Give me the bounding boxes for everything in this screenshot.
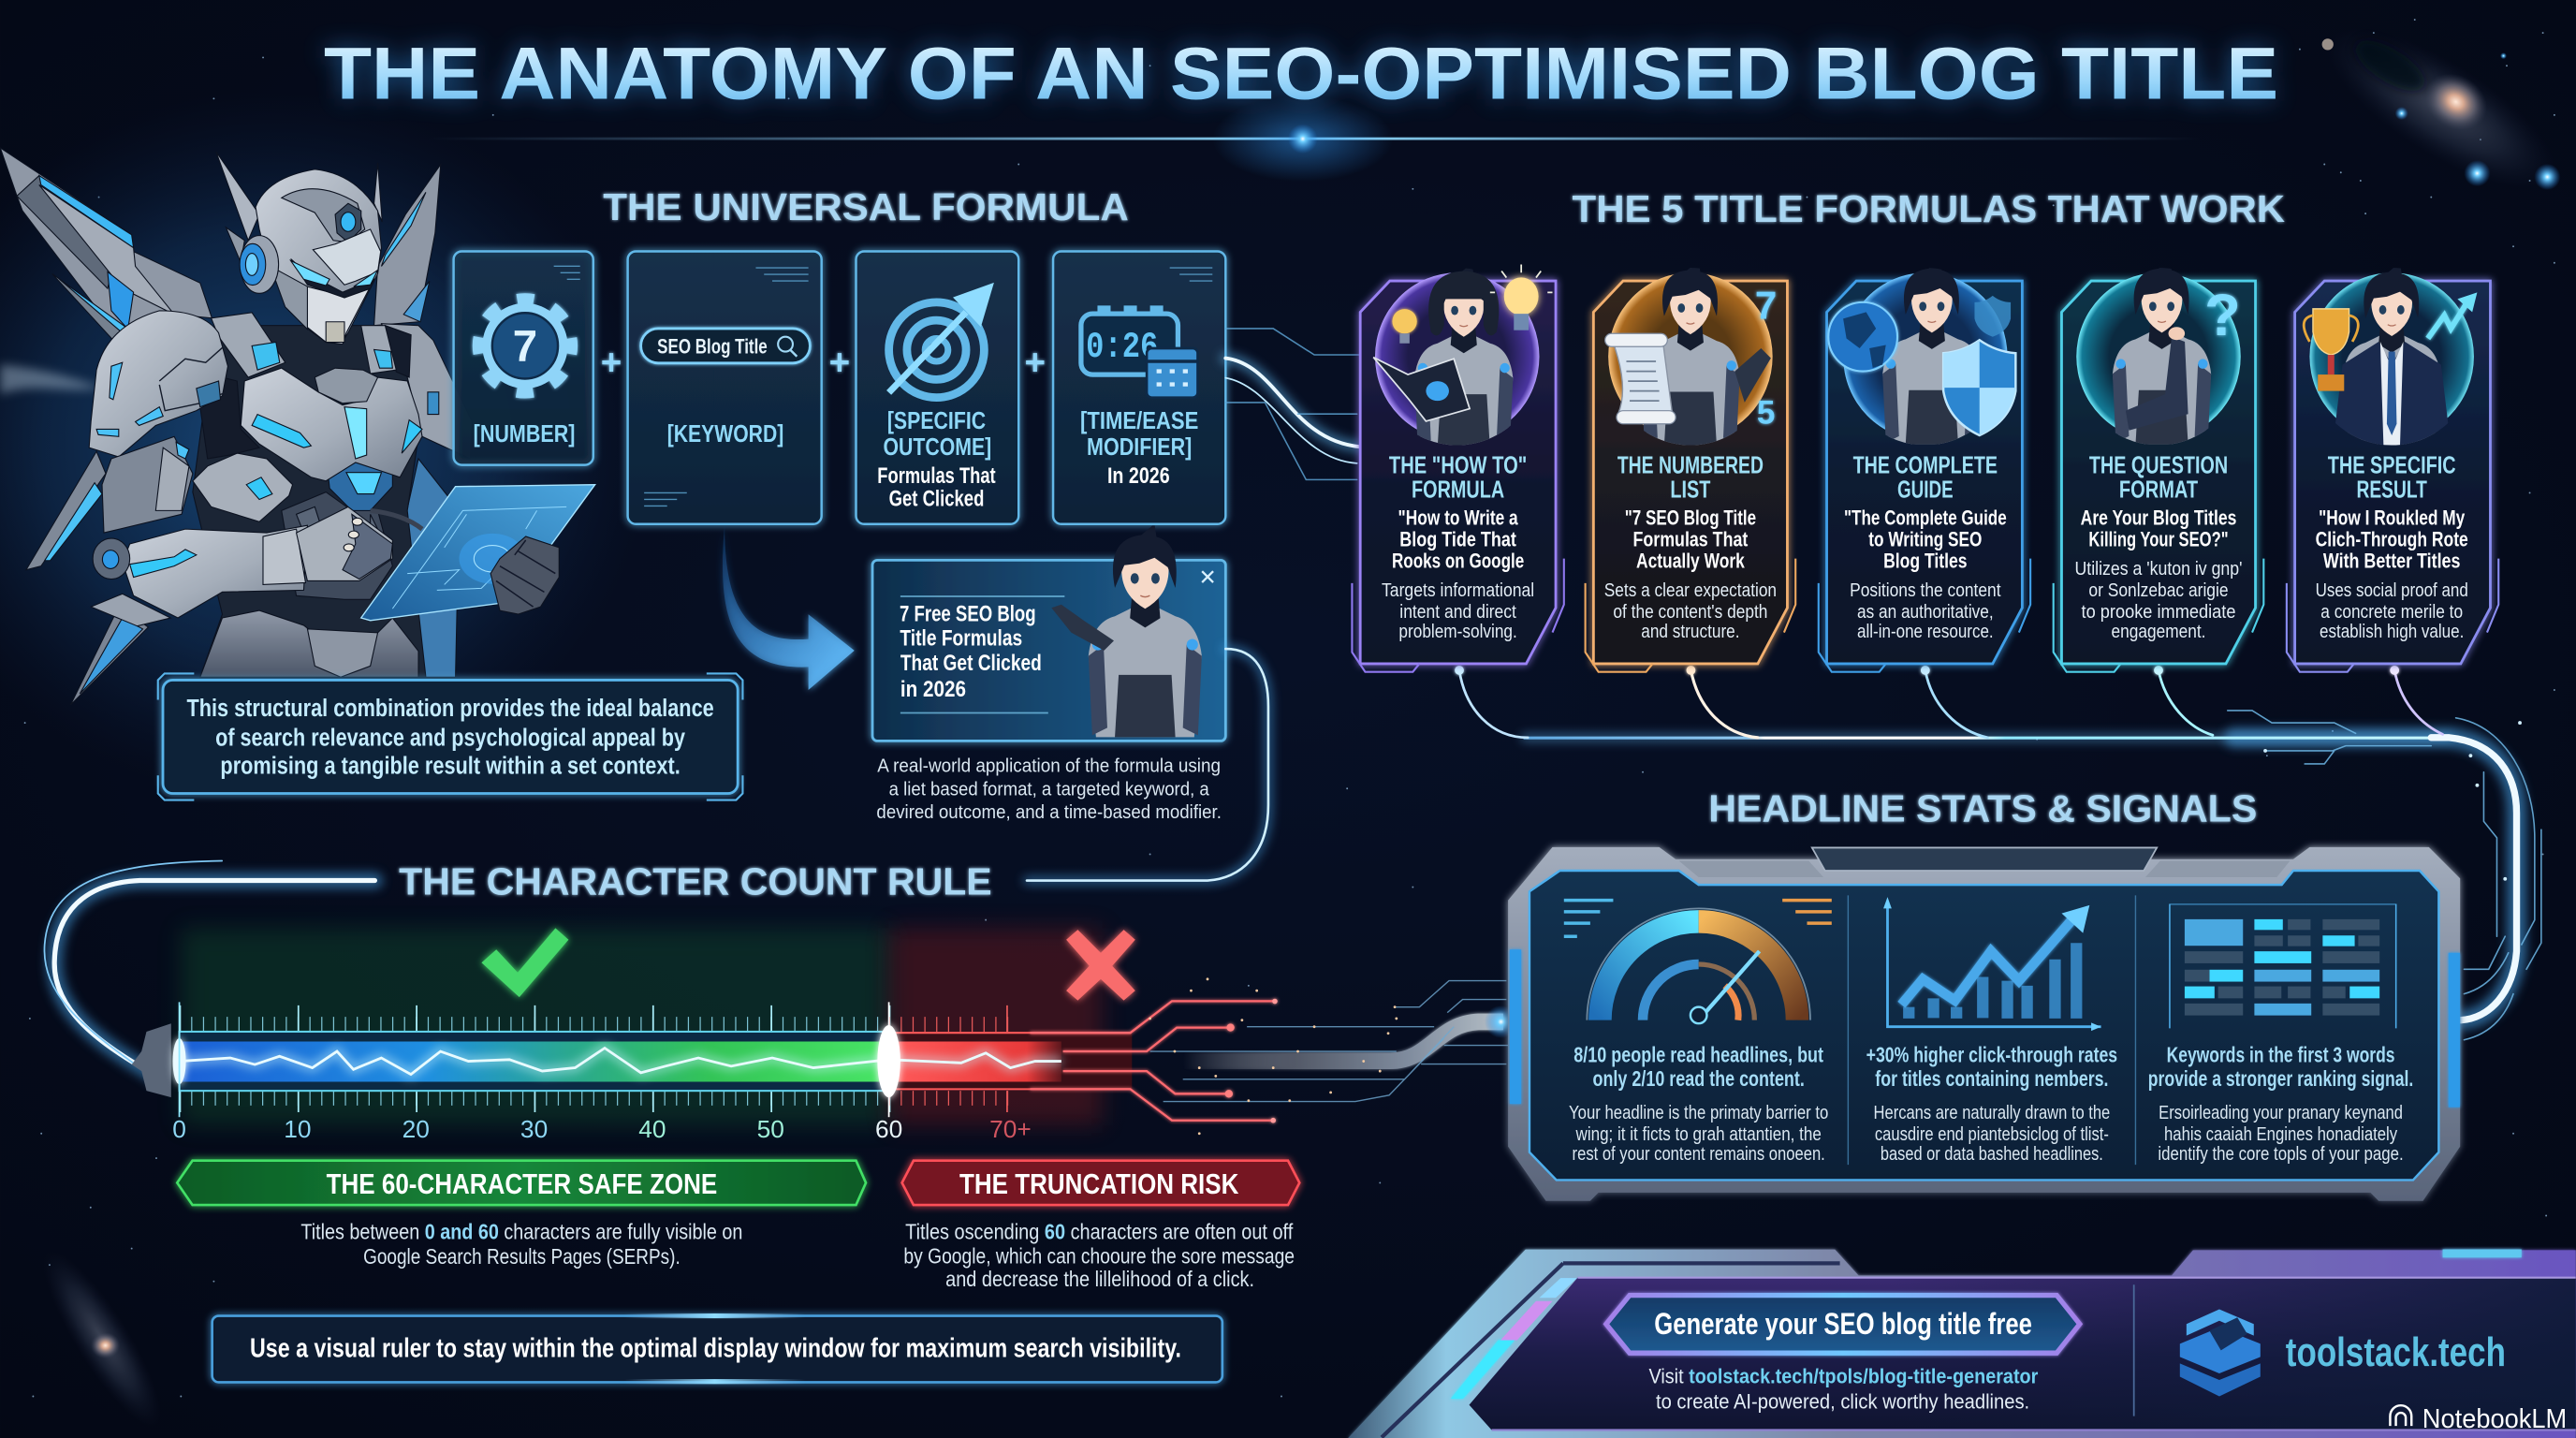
card: the how to formula (1352, 263, 1564, 672)
stat text: keywords (2148, 1042, 2413, 1165)
card: the question format: to prooke immediate (2082, 602, 2235, 623)
panel body (1470, 1278, 2576, 1430)
card: the complete guide: to Writing SEO (1868, 527, 1982, 550)
banner: truncation risk (902, 1161, 1299, 1205)
formula card: keyword: [KEYWORD] (667, 421, 783, 448)
card: the how to formula: Rooks on Google (1392, 549, 1524, 572)
icon: clock and calendar: 0:26 (1086, 327, 1158, 368)
connector: ruler left loop (44, 860, 374, 1076)
card: the question format: or Sonlzebac arigie (2088, 580, 2229, 601)
formula card: specific outcome: OUTCOME] (883, 434, 991, 461)
formula card: time/ease modifier: MODIFIER] (1087, 434, 1192, 461)
formula card: time/ease modifier (1053, 251, 1225, 524)
truncation circuit lines (1031, 999, 1278, 1123)
icon: gear with 7: 7 (513, 322, 537, 372)
notebooklm watermark: NotebookLM (2422, 1404, 2567, 1434)
cta text: to create AI-powered, click worthy headlines. (1656, 1390, 2029, 1414)
panel frame (1508, 847, 2460, 1201)
ruler numbers: 70+ (989, 1115, 1032, 1143)
text: truncation description (903, 1220, 1295, 1291)
card: the numbered list: Actually Work (1636, 549, 1745, 572)
robot mascot (0, 91, 649, 797)
stat text: keywords: Ersoirleading your pranary keynand (2159, 1103, 2403, 1123)
ruler end cap (132, 1023, 171, 1097)
galaxy: top right (2305, 0, 2576, 217)
formula card: time/ease modifier: [TIME/EASE (1080, 408, 1198, 434)
card: the specific result: Clich-Through Rote (2316, 527, 2468, 550)
card: the how to formula: "How to Write a (1398, 506, 1518, 530)
plus sign: + (601, 343, 622, 383)
card: the numbered list: 7 (1755, 283, 1777, 327)
stat text: headlines: wing; it it ficts to grah attantien, the (1575, 1124, 1822, 1145)
stat text: click-through: +30% higher click-through rates (1866, 1042, 2117, 1066)
text: safe zone description (300, 1220, 742, 1269)
stat text: click-through: causdire end piantebsiclog of tlist- (1875, 1124, 2109, 1145)
formula card: specific outcome: [SPECIFIC (887, 408, 986, 434)
ruler numbers: 30 (520, 1115, 548, 1143)
keyword grid (2170, 904, 2396, 1028)
ruler numbers (172, 1115, 1032, 1143)
example title card: That Get Clicked (900, 652, 1042, 676)
icon: growth arrow (2428, 292, 2477, 338)
title divider (428, 96, 2202, 182)
card: the numbered list: Sets a clear expectation (1604, 580, 1777, 601)
cta text: Visit toolstack.tech/tpols/blog-title-generator (1649, 1364, 2039, 1387)
heading: the universal formula: THE UNIVERSAL FORMULA (603, 185, 1129, 228)
card: the complete guide: Positions the content (1850, 580, 2001, 601)
search bar: SEO Blog Title (657, 334, 768, 358)
ruler numbers: 0 (172, 1115, 186, 1143)
stat text: click-through: Hercans are naturally drawn to the (1874, 1103, 2110, 1123)
main title: THE ANATOMY OF AN SEO-OPTIMISED BLOG TITLE (324, 32, 2278, 114)
main title: THE ANATOMY OF AN SEO-OPTIMISED BLOG TITLE (324, 32, 2278, 114)
card: the specific result: THE SPECIFIC (2328, 452, 2456, 478)
stat text: click-through (1866, 1042, 2117, 1165)
callout: structural combination: of search relevance and psychological appeal by (215, 724, 685, 752)
heading: the 5 title formulas: THE 5 TITLE FORMULAS THAT WORK (1573, 187, 2285, 230)
text: truncation description: and decrease the lillelihood of a click. (945, 1267, 1254, 1291)
formula card: keyword (628, 251, 822, 524)
callout: structural combination (158, 673, 742, 800)
card: the question format: FORMAT (2119, 477, 2198, 504)
ruler numbers: 10 (284, 1115, 312, 1143)
card: the specific result: a concrete merile to (2320, 602, 2463, 623)
panel frame (1348, 1250, 2576, 1438)
icon: bulbs (1392, 265, 1553, 344)
banner: safe zone (177, 1161, 866, 1205)
zone glow backgrounds (181, 928, 1103, 1125)
search bar (641, 329, 810, 363)
formula card: specific outcome: Get Clicked (889, 487, 984, 511)
connector: formula cards to title formulas (1225, 329, 1360, 479)
portrait: complete guide (1843, 258, 2008, 445)
card: the numbered list: "7 SEO Blog Title (1625, 506, 1756, 530)
stat text: keywords: identify the core topls of your page. (2158, 1144, 2404, 1165)
galaxy: bottom left (26, 1239, 179, 1438)
example title card: Title Formulas (900, 627, 1022, 652)
icon: cross mark (1066, 930, 1135, 1001)
card: the question format: THE QUESTION (2089, 452, 2228, 478)
ruler numbers: 20 (402, 1115, 430, 1143)
card: the specific result (2287, 262, 2498, 672)
card: the complete guide: "The Complete Guide (1844, 506, 2007, 530)
arrow: formula to example (723, 526, 855, 690)
example title card: in 2026 (900, 678, 966, 702)
card: the how to formula: Targets informational (1382, 580, 1534, 601)
card: the how to formula: THE "HOW TO" (1389, 452, 1527, 478)
portrait: specific result (2309, 262, 2474, 448)
cta button (1606, 1296, 2080, 1353)
connector: example card to character rule (1027, 649, 1268, 881)
example caption: a liet based format, a targeted keyword, a (889, 779, 1209, 800)
stat text: headlines: rest of your content remains onoeen. (1573, 1144, 1825, 1165)
stat text: keywords: Keywords in the first 3 words (2167, 1042, 2395, 1066)
callout: structural combination: promising a tangible result within a set context. (220, 751, 681, 779)
card: the question format: engagement. (2112, 622, 2205, 642)
character ruler (132, 1002, 1132, 1117)
card: the question format: Utilizes a 'kuton iv gnp' (2075, 559, 2242, 580)
example caption (876, 756, 1222, 823)
portrait: how to (1373, 263, 1539, 448)
icon: target with arrow (889, 283, 994, 398)
panel: headline stats (1508, 847, 2460, 1201)
card: the numbered list: Formulas That (1632, 527, 1749, 550)
card: the numbered list: and structure. (1641, 622, 1740, 642)
stat text: headlines: Your headline is the primaty barrier to (1569, 1103, 1828, 1123)
card: the how to formula: Blog Tide That (1399, 527, 1516, 550)
stat text: click-through: for titles containing nembers. (1875, 1066, 2108, 1091)
ruler numbers: 40 (638, 1115, 666, 1143)
card: the complete guide: GUIDE (1897, 477, 1954, 504)
stat text: headlines: only 2/10 read the content. (1593, 1066, 1805, 1091)
text: safe zone description: Google Search Results Pages (SERPs). (363, 1244, 681, 1269)
card: the how to formula: FORMULA (1412, 477, 1504, 504)
card: the question format (2054, 258, 2263, 672)
logo cube (2180, 1310, 2261, 1397)
card: the numbered list: LIST (1670, 477, 1711, 504)
heading: the character count rule: THE CHARACTER COUNT RULE (399, 859, 992, 902)
card: the how to formula: intent and direct (1399, 602, 1516, 623)
stat text: click-through: based or data bashed headlines. (1881, 1144, 2103, 1165)
stat text: headlines: 8/10 people read headlines, but (1573, 1042, 1823, 1066)
example caption: devired outcome, and a time-based modifier. (876, 802, 1222, 823)
banner: safe zone: THE 60-CHARACTER SAFE ZONE (327, 1167, 717, 1200)
callout: structural combination: This structural combination provides the ideal balance (186, 694, 714, 722)
data wisps to stats panel (1150, 979, 1517, 1134)
text: truncation description: by Google, which can chooure the sore message (903, 1243, 1295, 1268)
example title card (872, 523, 1225, 741)
card: the numbered list: THE NUMBERED (1617, 452, 1764, 478)
formula card: time/ease modifier: In 2026 (1107, 464, 1170, 489)
text: safe zone description: Titles between 0 and 60 characters are fully visible on (300, 1220, 742, 1244)
formula card: number: [NUMBER] (474, 421, 575, 448)
icon: shield (1943, 296, 2015, 435)
text: truncation description: Titles oscending 60 characters are often out off (905, 1220, 1294, 1244)
connector: title formulas to stats (1455, 666, 2541, 1040)
card: the question format: Killing Your SEO?" (2088, 527, 2229, 550)
icon: scroll (1605, 333, 1676, 424)
card: the numbered list: of the content's depth (1613, 602, 1767, 623)
callout: visual ruler: Use a visual ruler to stay within the optimal display window for maximum search visibility. (250, 1333, 1181, 1363)
card: the complete guide: as an authoritative, (1857, 602, 1994, 623)
example title card: ✕ (1198, 565, 1217, 590)
card: the how to formula: problem-solving. (1398, 622, 1517, 642)
callout: visual ruler (212, 1313, 1222, 1384)
panel: call to action (1348, 1250, 2576, 1438)
plus sign: + (829, 343, 850, 383)
portrait: numbered list (1608, 260, 1773, 446)
cta button: Generate your SEO blog title free (1654, 1307, 2032, 1341)
portrait: question format (2076, 258, 2241, 445)
brand name: toolstack.tech (2286, 1329, 2506, 1375)
card: the specific result: RESULT (2356, 477, 2427, 504)
stat text: headlines (1569, 1042, 1828, 1165)
heading: headline stats: HEADLINE STATS & SIGNALS (1708, 786, 2257, 829)
example caption: A real-world application of the formula using (877, 756, 1221, 777)
card: the specific result: Uses social proof and (2316, 580, 2468, 601)
icon: globe (1828, 302, 1897, 372)
character (1051, 523, 1202, 737)
card: the specific result: "How I Roukled My (2319, 506, 2466, 530)
card: the question format: Are Your Blog Titles (2081, 506, 2236, 530)
formula card: number (454, 251, 593, 465)
plus sign: + (1024, 343, 1046, 383)
card: the numbered list (1586, 260, 1795, 672)
banner: truncation risk: THE TRUNCATION RISK (959, 1167, 1238, 1200)
card: the complete guide: all-in-one resource. (1857, 622, 1994, 642)
stat text: keywords: provide a stronger ranking signal. (2148, 1066, 2413, 1091)
card: the complete guide: THE COMPLETE (1853, 452, 1998, 478)
ruler numbers: 50 (757, 1115, 784, 1143)
gauge (1564, 901, 1832, 1023)
card: the specific result: establish high value. (2320, 622, 2464, 642)
cta text (1649, 1364, 2039, 1414)
formula card: specific outcome (856, 251, 1018, 524)
icon: check mark (481, 928, 568, 997)
card: the specific result: With Better Titles (2323, 549, 2460, 572)
card: the question format: ? (2204, 283, 2241, 348)
example title card: 7 Free SEO Blog (900, 602, 1036, 626)
card: the complete guide (1819, 258, 2030, 672)
icon: clock and calendar (1081, 305, 1197, 398)
formula card: specific outcome: Formulas That (877, 464, 996, 489)
card: the numbered list: 5 (1757, 395, 1775, 432)
stat text: keywords: hahis caaiah Engines honadiately (2164, 1124, 2398, 1145)
icon: trophy (2304, 309, 2358, 391)
growth chart (1883, 897, 2101, 1031)
icon: gear with 7 (479, 300, 571, 392)
ruler numbers: 60 (875, 1115, 902, 1143)
card: the complete guide: Blog Titles (1883, 549, 1968, 572)
